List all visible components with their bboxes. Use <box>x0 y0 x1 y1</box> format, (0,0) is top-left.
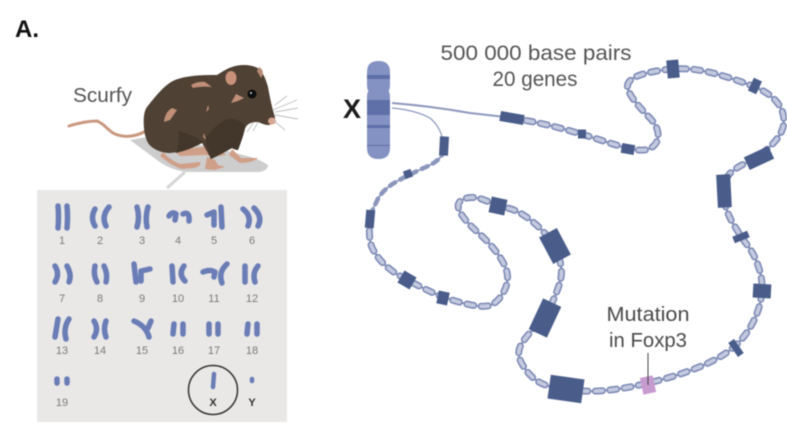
panel label: A. <box>15 16 39 43</box>
X chromosome label: X <box>343 94 361 124</box>
chromosome number labels: 19 <box>56 397 68 409</box>
chromosome number labels: 5 <box>211 235 217 247</box>
caption: region size: 500 000 base pairs <box>440 42 632 65</box>
chromosome number labels: 12 <box>246 293 258 305</box>
chromosome number labels: 2 <box>97 235 103 247</box>
callout: mutation in Foxp3: Mutation <box>606 304 690 326</box>
chromosome number labels: 4 <box>175 235 181 247</box>
chromosome number labels: 6 <box>249 235 255 247</box>
chromosome number labels: 7 <box>59 293 65 305</box>
callout: mutation in Foxp3 <box>606 304 690 385</box>
chromosome number labels: 13 <box>56 345 68 357</box>
mouse label: Scurfy <box>73 85 132 107</box>
chromosome number labels: 17 <box>208 345 220 357</box>
icon: X chromosome <box>367 61 390 159</box>
chromosome number labels: 14 <box>94 345 106 357</box>
Foxp3 mutation site <box>640 375 656 395</box>
chromosome number labels: 16 <box>172 345 184 357</box>
chromosome number labels: 1 <box>59 235 65 247</box>
panel: karyotype <box>37 190 287 422</box>
callout: mutation in Foxp3: in Foxp3 <box>609 330 687 352</box>
chromosome number labels: 8 <box>97 293 103 305</box>
connector from mouse to karyotype <box>167 172 185 188</box>
circle around X chromosome <box>188 366 238 414</box>
gene blocks <box>365 60 774 403</box>
chromosome number labels: 11 <box>208 293 220 305</box>
chromosome number labels <box>56 235 258 409</box>
diagram: DNA strand with genes <box>365 60 784 403</box>
chromosomes <box>55 206 260 387</box>
chromosome number labels: 9 <box>139 293 145 305</box>
chromosome number labels: 3 <box>139 235 145 247</box>
chromosome number labels: X <box>209 397 217 409</box>
chromosome number labels: 18 <box>246 345 258 357</box>
chromosome number labels: 10 <box>172 293 184 305</box>
chromosome number labels: 15 <box>136 345 148 357</box>
illustration: scurfy mouse <box>69 65 298 172</box>
caption: region size <box>440 42 632 91</box>
chromosome number labels: Y <box>248 397 256 409</box>
caption: region size: 20 genes <box>492 68 578 91</box>
